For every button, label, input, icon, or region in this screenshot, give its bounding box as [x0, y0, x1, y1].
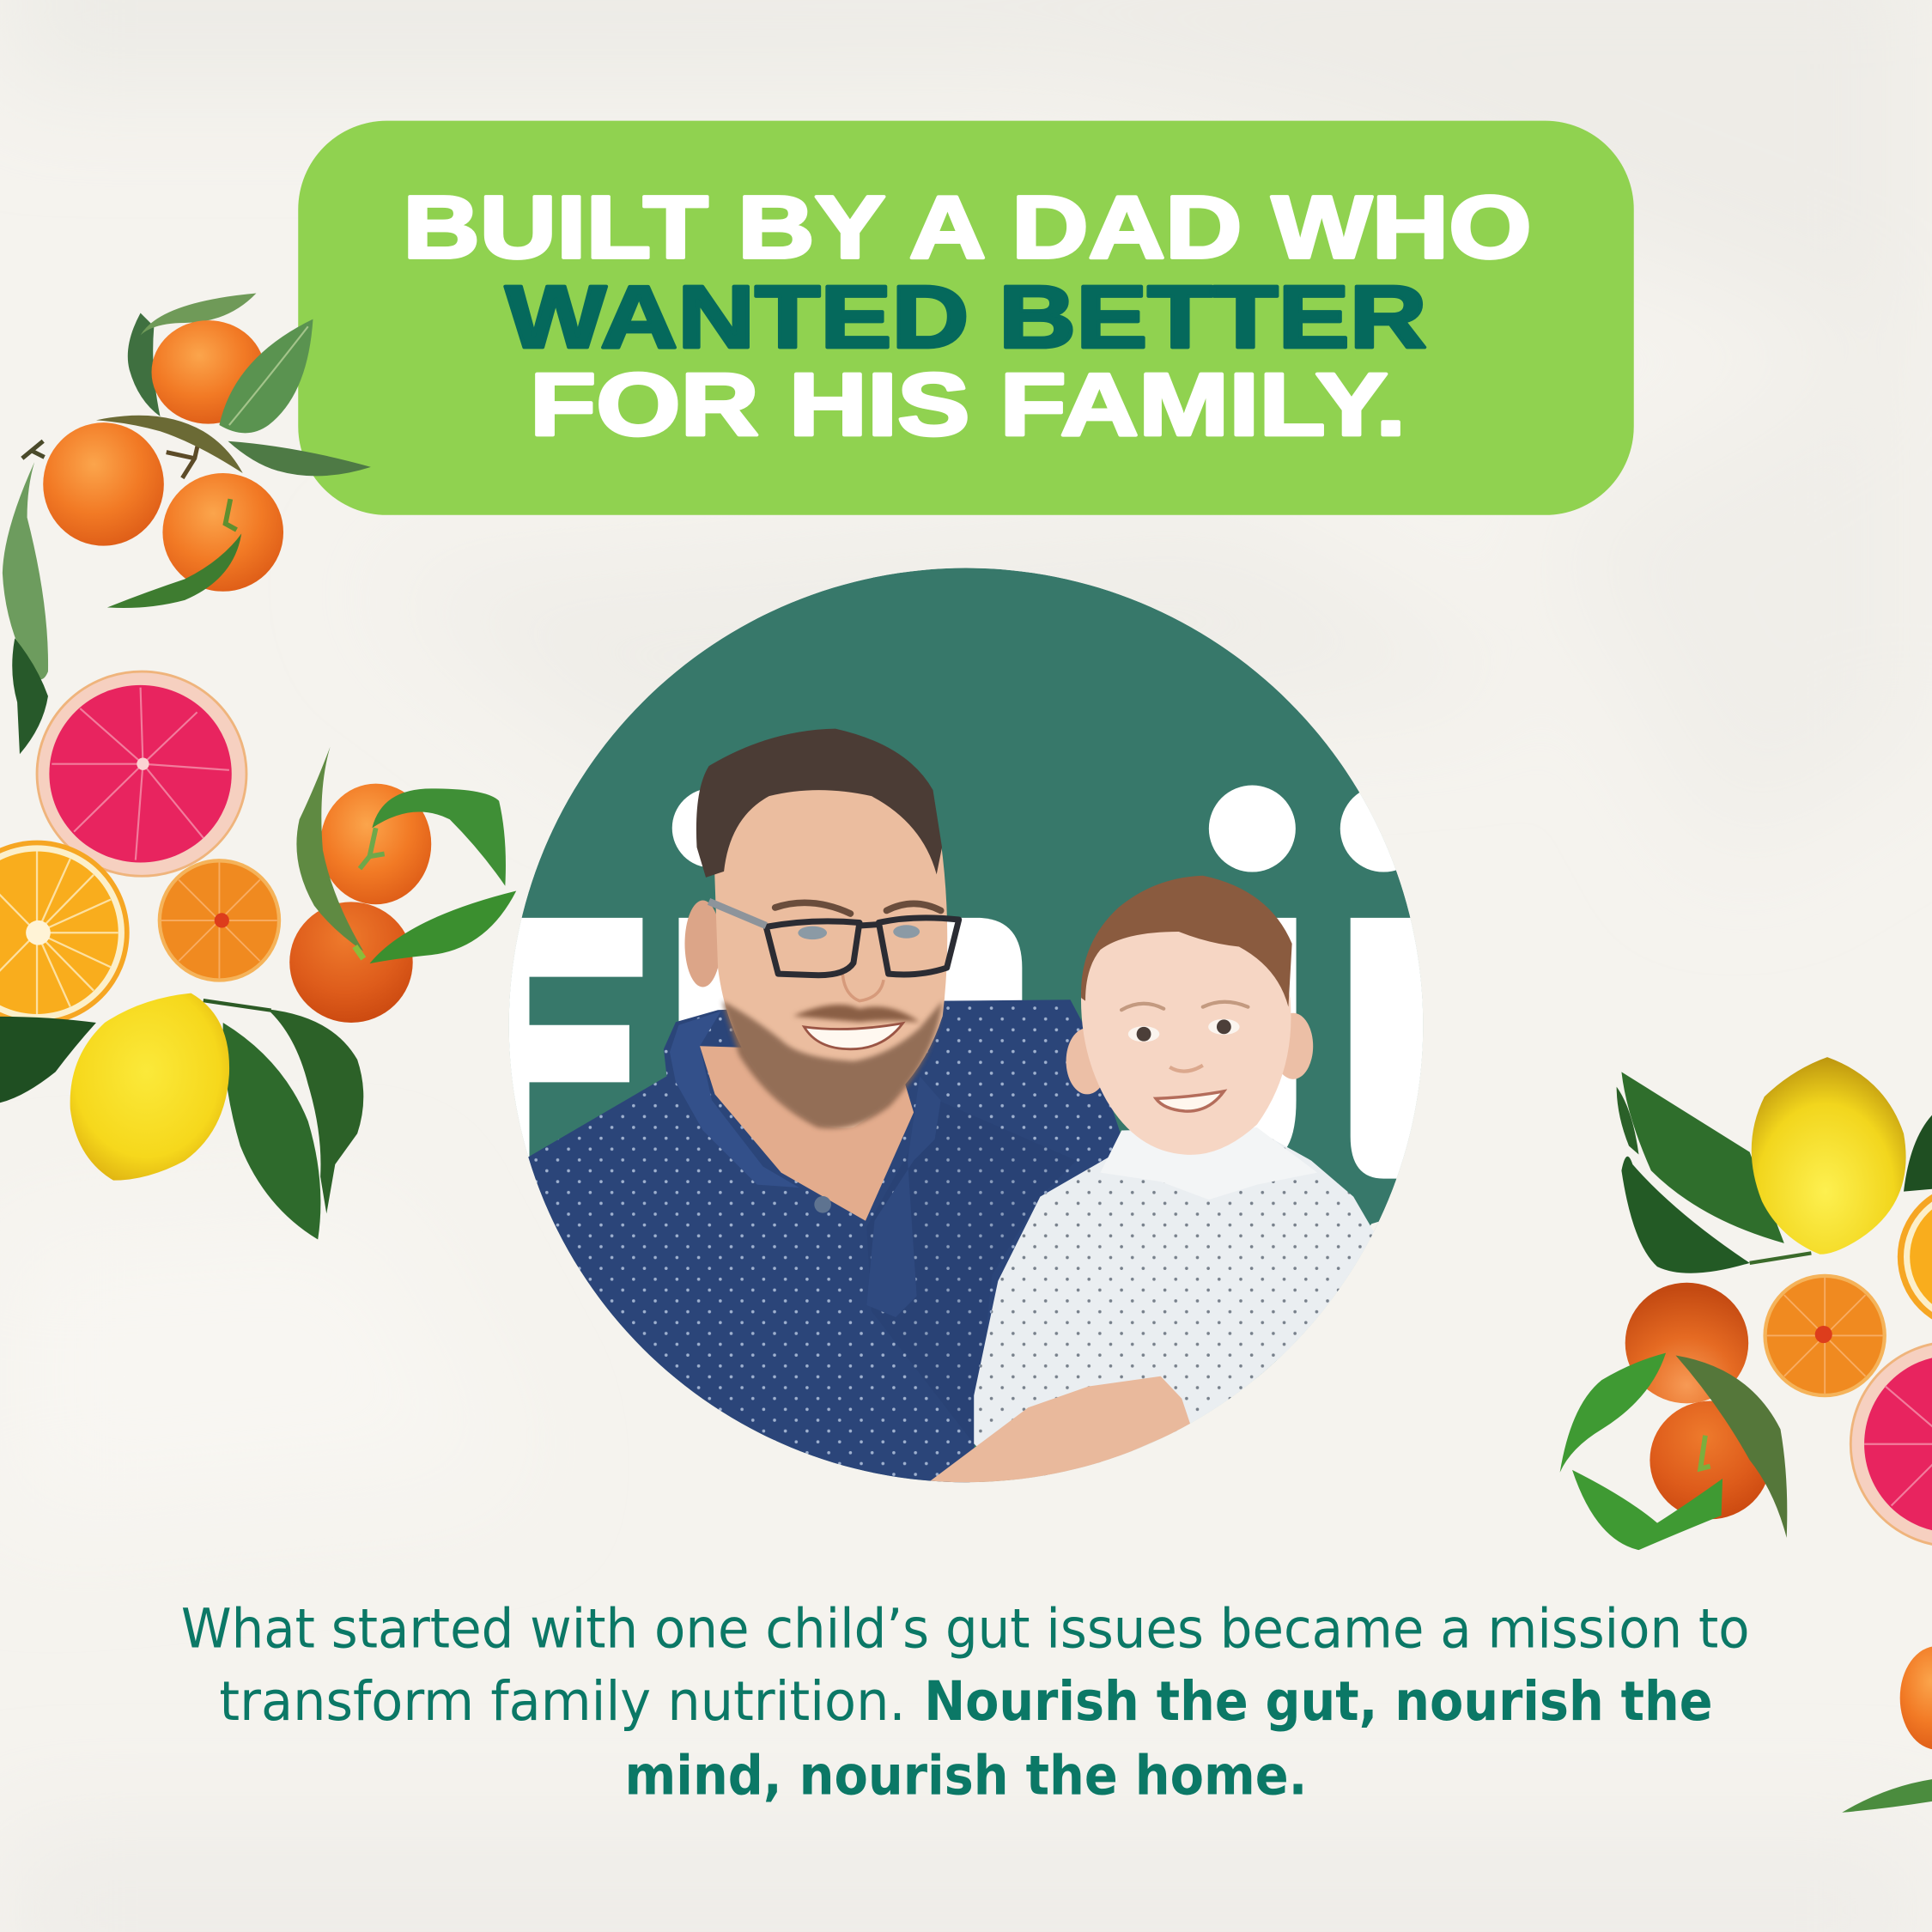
body line 2 regular: transform family nutrition. [219, 1669, 906, 1733]
heading line 2: WANTED BETTER [505, 267, 1427, 367]
orange slice [0, 841, 130, 1025]
grapefruit slice [37, 671, 246, 876]
right orange slice [1898, 1183, 1932, 1331]
bottom right leaf [1842, 1779, 1932, 1813]
right lemon with leaves [1617, 1057, 1932, 1273]
body text [181, 1597, 1750, 1807]
body line 3 bold: mind, nourish the home. [625, 1743, 1307, 1807]
boy shirt [974, 1131, 1375, 1489]
man collar [670, 1012, 799, 1188]
man glasses [709, 902, 959, 975]
bottom right mandarin [1900, 1646, 1932, 1750]
man hand [920, 1376, 1191, 1489]
man hair [696, 729, 942, 878]
man shirt [528, 999, 1121, 1482]
body line 1: What started with one child’s gut issues became a mission to [181, 1597, 1750, 1661]
man nose [842, 974, 884, 1001]
fruit cluster: left slices and lemon [0, 671, 516, 1240]
boy nose [1170, 1066, 1203, 1072]
right mandarins [1560, 1283, 1787, 1550]
boy hair [1081, 876, 1292, 1007]
mandarins [289, 747, 516, 1023]
body line 2 bold: Nourish the gut, nourish the [924, 1669, 1713, 1733]
fruit cluster: right slices and lemon [1560, 1057, 1932, 1813]
title panel [298, 121, 1634, 515]
man ear [684, 901, 721, 987]
boy face [1081, 920, 1291, 1155]
man brows [775, 902, 941, 914]
man eyes [798, 927, 827, 939]
people illustration [528, 728, 1379, 1482]
boy ears [1066, 1028, 1109, 1094]
right tangerine slice [1763, 1274, 1886, 1397]
tangerine slice [158, 859, 281, 982]
fruit cluster: top left tangerines [3, 294, 371, 754]
boy brows [1121, 1002, 1248, 1010]
faded lower right of circle [1131, 1221, 1379, 1451]
heading line 1: BUILT BY A DAD WHO [403, 177, 1532, 276]
photo: father and son in circle [508, 568, 1424, 1482]
man neck [700, 1046, 914, 1221]
man smile [804, 1024, 902, 1049]
boy eyes [1128, 1026, 1159, 1042]
logo letters behind people [504, 786, 1437, 1179]
lemon with leaves [0, 993, 363, 1240]
man shirt shading [871, 1115, 1068, 1422]
boy smile [1156, 1091, 1224, 1111]
right grapefruit slice [1850, 1342, 1932, 1546]
man stubble [722, 1001, 943, 1128]
heading line 3: FOR HIS FAMILY. [530, 355, 1406, 454]
boy collar [1101, 1127, 1317, 1200]
man face [714, 763, 947, 1128]
